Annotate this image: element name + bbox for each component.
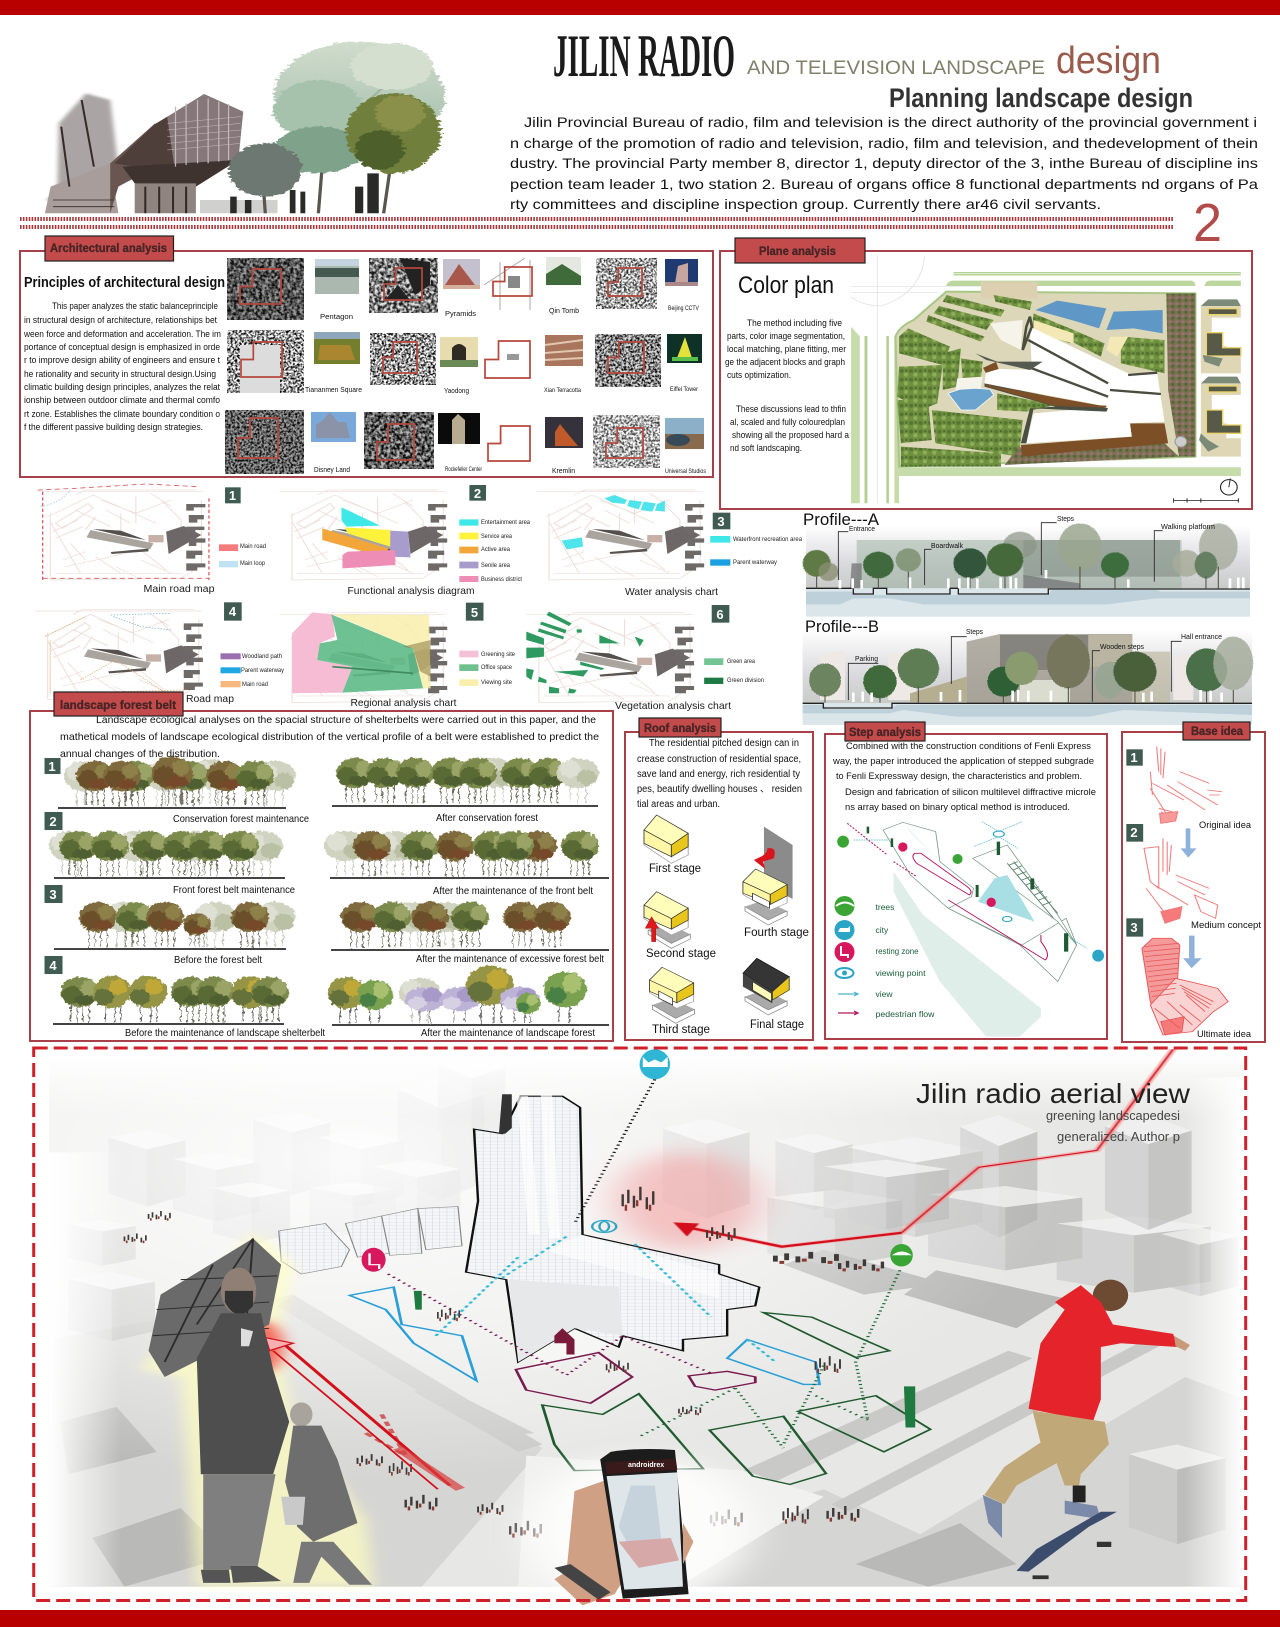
body text: forest belt: Landscape ecological analyses on the spacial structure of shelterbelts were carried out in this paper, and the xyxy=(96,714,596,726)
tag: landscape forest belt xyxy=(54,692,183,716)
profile A: Boardwalk xyxy=(931,543,963,550)
stage labels xyxy=(646,863,809,1036)
body text: principles: in structural design of architecture, relationships bet xyxy=(24,315,217,325)
panel: base idea xyxy=(1122,722,1265,1042)
body text: principles: f the different passive building design strategies. xyxy=(24,422,203,432)
concept 1 xyxy=(1126,747,1222,823)
number markers: base idea: 1 xyxy=(1130,750,1138,765)
intro text block xyxy=(510,114,1258,212)
body text: step: to Fenli Expressway design, the characteristics and problem. xyxy=(836,771,1082,782)
map 5: regional analysis chart: Viewing site xyxy=(481,679,512,686)
icon: first stage house xyxy=(644,815,688,863)
stage labels: Second stage xyxy=(646,948,716,960)
map 4: road map xyxy=(35,602,285,705)
stage labels: Final stage xyxy=(750,1019,804,1031)
body text: color plan: nd soft landscaping. xyxy=(730,443,802,453)
number markers: base idea: 3 xyxy=(1130,920,1138,935)
body text: color plan: local matching, plane fitting, mer xyxy=(727,344,846,354)
text: JILIN RADIO xyxy=(553,23,735,89)
image labels: Universal Studios xyxy=(665,469,706,475)
tree belt captions: After the maintenance of excessive forest belt xyxy=(416,953,604,965)
tree belt captions: After conservation forest xyxy=(436,812,538,824)
aerial view caption: greening landscapedesi xyxy=(1046,1109,1180,1123)
tag: base idea xyxy=(1183,722,1250,740)
profile A xyxy=(803,510,1250,617)
heading: principles of architectural design: Principles of architectural design xyxy=(24,274,225,291)
map 1: main road map: Main loop xyxy=(240,560,265,567)
tree belt captions: Before the forest belt xyxy=(174,954,262,966)
panel: roof analysis xyxy=(625,718,813,1040)
tag: landscape forest belt: landscape forest belt xyxy=(60,698,176,712)
stage labels: First stage xyxy=(649,863,701,875)
image labels: Xian Terracotta xyxy=(544,388,582,394)
image labels: Eiffel Tower xyxy=(670,387,698,393)
body text: principles xyxy=(23,301,221,432)
map 3: water analysis chart xyxy=(536,490,802,598)
site outlines xyxy=(349,1287,930,1484)
number markers: 1 xyxy=(48,759,56,774)
panel: plane analysis xyxy=(720,238,1252,509)
body text: principles: This paper analyzes the static balanceprinciple xyxy=(52,301,218,311)
tag: step analysis xyxy=(845,722,925,741)
dashed frame xyxy=(34,1048,1246,1600)
map 1: main road map xyxy=(38,484,266,595)
icon: resting zone marker xyxy=(362,1248,386,1272)
base idea labels: Ultimate idea xyxy=(1197,1029,1252,1040)
skateboarder xyxy=(983,1280,1190,1579)
body text: principles: r to improve design ability of engineers and ensure t xyxy=(24,355,220,365)
body text: step: Design and fabrication of silicon multilevel diffractive microle xyxy=(845,787,1096,798)
dotted divider xyxy=(20,219,1173,227)
tag: plane analysis: Plane analysis xyxy=(759,244,836,258)
number markers: 4 xyxy=(49,958,57,973)
tree belt captions xyxy=(125,812,604,1039)
body text: forest belt: mathetical models of landscape ecological distribution of the vertical profile of a belt were established to predict the xyxy=(60,731,599,743)
map 4: road map: 4 xyxy=(229,604,237,619)
arrow: medium to ultimate xyxy=(1183,936,1202,968)
tag: plane analysis xyxy=(735,238,865,263)
number markers: 3 xyxy=(49,887,57,902)
icon: fourth stage house xyxy=(743,827,793,925)
body text: step xyxy=(832,741,1096,813)
body text: roof: pes, beautify dwelling houses 、 residen xyxy=(637,784,802,795)
legend item: view: view xyxy=(876,989,893,999)
intro text block: rty committees and discipline inspection group. Currently there ar46 civil servants. xyxy=(510,196,1101,212)
subtitle: design: design xyxy=(1056,40,1161,82)
map 1: main road map: Main road map xyxy=(144,583,215,595)
tag: step analysis: Step analysis xyxy=(849,725,921,739)
house stage diagrams xyxy=(644,815,793,1023)
heading: aerial view: Jilin radio aerial view xyxy=(916,1078,1191,1109)
tree belt captions: Conservation forest maintenance xyxy=(173,813,309,825)
map 2: functional analysis diagram: Service area xyxy=(481,533,512,540)
map 2: functional analysis diagram: Senile area xyxy=(481,562,510,569)
body text: principles: ween force and deformation and acceleration. The im xyxy=(23,329,221,339)
red lower arrow xyxy=(239,1321,460,1489)
header illustration: building and trees xyxy=(45,42,445,213)
ground and city background xyxy=(49,1053,1245,1587)
phone screen brand: androidrex xyxy=(628,1462,664,1469)
subtitle: and television landscape: AND TELEVISION LANDSCAPE xyxy=(747,58,1045,79)
map 3: water analysis chart: 3 xyxy=(717,514,725,529)
aerial view caption: generalized. Author p xyxy=(1057,1130,1180,1144)
stage labels: Fourth stage xyxy=(744,927,809,939)
legend item: city: city xyxy=(876,925,889,935)
crowds of people xyxy=(124,1187,882,1538)
body text: color plan: parts, color image segmentation, xyxy=(727,331,845,341)
map 4: road map: Parent waterway xyxy=(241,667,285,674)
profile A: Walking platform xyxy=(1161,524,1215,531)
body text: roof: save land and energy, rich residential ty xyxy=(637,769,800,780)
tree belts row 2 xyxy=(49,831,609,878)
image labels: Pyramids xyxy=(445,309,476,318)
map 5: regional analysis chart: Regional analysis chart xyxy=(350,697,457,709)
map 2: functional analysis diagram xyxy=(279,485,530,597)
profile B: Steps xyxy=(966,629,983,636)
body text: step: Combined with the construction conditions of Fenli Express xyxy=(846,741,1091,752)
massing concept drawings xyxy=(1126,747,1228,1035)
tag: roof analysis: Roof analysis xyxy=(644,721,716,735)
map 6: vegetation analysis chart: 6 xyxy=(716,607,724,622)
icon: tree marker xyxy=(890,1244,913,1267)
tree belts row 3 xyxy=(54,902,609,950)
body text: forest belt: annual changes of the distribution. xyxy=(60,748,220,760)
number markers: base idea xyxy=(1130,750,1138,935)
body text: principles: portance of conceptual design is emphasized in orde xyxy=(24,342,220,352)
map 5: regional analysis chart: Office space xyxy=(481,664,512,671)
legend item: pedestrian flow: pedestrian flow xyxy=(876,1009,935,1019)
body text: step: ns array based on binary optical method is introduced. xyxy=(845,802,1070,813)
profile A: Profile---A xyxy=(803,510,880,529)
page number: 2 xyxy=(1193,193,1222,253)
body text: color plan xyxy=(725,318,849,453)
body text: principles: ionship between outdoor climate and thermal comfo xyxy=(24,395,220,405)
image labels: Yaodong xyxy=(444,386,469,395)
profile A: Steps xyxy=(1057,516,1074,523)
panel: landscape forest belt xyxy=(30,692,613,1041)
stage labels: Third stage xyxy=(652,1024,710,1036)
profile B: Wooden steps xyxy=(1100,644,1144,651)
image labels: Kremlin xyxy=(552,466,575,475)
body text: step: way, the paper introduced the application of stepped subgrade xyxy=(832,756,1094,767)
tree belts row 4 xyxy=(53,966,609,1025)
icon: architecture model xyxy=(45,93,278,213)
map 2: functional analysis diagram: Functional analysis diagram xyxy=(348,585,475,597)
circulation diagram xyxy=(837,822,1104,1037)
profile B: Hall entrance xyxy=(1181,634,1222,641)
man with umbrella glow xyxy=(141,1231,374,1587)
map 4: road map: Woodland path xyxy=(242,653,282,660)
body text: principles: rt zone. Establishes the climate boundary condition o xyxy=(24,409,220,419)
heading: color plan: Color plan xyxy=(738,272,834,299)
map 4: road map: Main road xyxy=(242,681,268,688)
map 1: main road map: Main road xyxy=(240,543,266,550)
top red bar xyxy=(0,0,1280,15)
map 3: water analysis chart: Parent waterway xyxy=(733,559,778,566)
aerial view caption xyxy=(1046,1109,1180,1144)
red route arrow xyxy=(673,1049,1173,1247)
image grid: aerial and reference photos xyxy=(225,257,704,474)
map 6: vegetation analysis chart: Green division xyxy=(727,677,764,684)
legend item: trees: trees xyxy=(876,902,894,912)
tag: architectural analysis: Architectural analysis xyxy=(50,241,167,255)
panel: step analysis xyxy=(825,722,1107,1039)
body text: roof: tial areas and urban. xyxy=(637,799,720,810)
image labels: Pentagon xyxy=(320,312,353,321)
intro text block: dustry. The provincial Party member 8, director 1, deputy director of the 3, inthe Bureau of discipline ins xyxy=(510,155,1258,171)
image labels: Beijing CCTV xyxy=(668,306,699,312)
section profiles xyxy=(803,510,1253,725)
body text: color plan: The method including five xyxy=(747,318,842,328)
map 2: functional analysis diagram: Entertainment area xyxy=(481,519,530,526)
woman walking xyxy=(281,1402,372,1585)
map 2: functional analysis diagram: Active area xyxy=(481,546,510,553)
map 5: regional analysis chart: 5 xyxy=(471,605,478,620)
map 5: regional analysis chart: Greening site xyxy=(481,651,515,658)
body text: roof: The residential pitched design can in xyxy=(649,738,799,749)
tag: architectural analysis xyxy=(45,236,174,261)
map 3: water analysis chart: Water analysis chart xyxy=(625,586,718,598)
concept 3 xyxy=(1126,918,1228,1035)
base idea labels: Original idea xyxy=(1199,820,1252,831)
intro text block: Jilin Provincial Bureau of radio, film and television is the direct authority of the provincial government i xyxy=(524,114,1257,130)
scene artwork xyxy=(49,1049,1245,1605)
icon: blue city marker xyxy=(640,1049,670,1079)
heading: planning landscape design: Planning landscape design xyxy=(889,83,1193,113)
tag: roof analysis xyxy=(639,718,721,737)
legend item: resting zone: resting zone xyxy=(876,946,919,956)
base idea labels xyxy=(1191,820,1261,1040)
arrow: original to medium xyxy=(1181,828,1197,858)
profile B: Profile---B xyxy=(805,617,879,636)
body text: color plan: These discussions lead to thfin xyxy=(736,404,846,414)
body text: roof xyxy=(637,738,802,810)
body text: principles: he rationality and security in structural design.Using xyxy=(24,369,216,379)
profile B: Parking xyxy=(855,656,878,663)
intro text block: n charge of the promotion of radio and television, radio, film and television, and thedevelopment of thein xyxy=(510,135,1258,151)
tree belt captions: After the maintenance of the front belt xyxy=(433,885,593,897)
body text: principles: climatic building design principles, analyzes the relat xyxy=(24,382,220,392)
residential blocks xyxy=(279,1207,462,1274)
number markers: 2 xyxy=(49,814,57,829)
phone in hand xyxy=(526,1449,751,1605)
number markers xyxy=(44,758,62,974)
icon: second stage house xyxy=(644,892,690,948)
man with umbrella xyxy=(149,1238,289,1583)
concept 2 xyxy=(1126,824,1218,923)
icon: viewing point marker xyxy=(592,1220,616,1232)
panel: architectural analysis xyxy=(20,236,713,477)
image labels: Qin Tomb xyxy=(549,306,579,315)
figure silhouettes in scene xyxy=(414,1291,915,1428)
image labels: Tiananmen Square xyxy=(305,385,362,394)
map 6: vegetation analysis chart: Vegetation analysis chart xyxy=(615,700,731,712)
map 6: vegetation analysis chart xyxy=(526,605,764,712)
tree belt captions: Before the maintenance of landscape shelterbelt xyxy=(125,1027,325,1039)
number markers: base idea: 2 xyxy=(1130,825,1138,840)
tag: base idea: Base idea xyxy=(1191,724,1243,738)
image labels: Disney Land xyxy=(314,465,350,474)
aerial view scene xyxy=(34,1048,1246,1605)
legend item: viewing point: viewing point xyxy=(876,968,926,978)
icon: final stage house xyxy=(743,958,789,1015)
radio tower building xyxy=(466,1094,759,1362)
tree belt captions: After the maintenance of landscape forest xyxy=(421,1027,595,1039)
profile B xyxy=(803,617,1253,725)
body text: forest belt xyxy=(60,714,599,760)
body text: color plan: al, scaled and fully colouredplan xyxy=(730,417,845,427)
image labels: Rockefeller Center xyxy=(445,467,482,473)
map 3: water analysis chart: Waterfront recreation area xyxy=(733,536,802,543)
body text: color plan: cuts optimization. xyxy=(727,370,791,380)
dotted connector lines xyxy=(388,1079,900,1448)
analysis maps 1-6 xyxy=(35,484,802,712)
map 1: main road map: 1 xyxy=(229,488,236,503)
body text: color plan: ge the adjacent blocks and graph xyxy=(725,357,845,367)
tree belt captions: Front forest belt maintenance xyxy=(173,884,295,896)
colour site plan xyxy=(851,255,1241,503)
base idea labels: Medium concept xyxy=(1191,920,1261,931)
body text: color plan: showing all the proposed hard a xyxy=(732,430,849,440)
intro text block: pection team leader 1, two station 2. Bureau of organs office 8 functional departments nd organs of Pa xyxy=(510,176,1258,192)
red glow behind crowd xyxy=(615,1152,759,1250)
icon: third stage house xyxy=(649,967,694,1023)
body text: roof: crease construction of residential space, xyxy=(637,754,801,765)
map 2: functional analysis diagram: 2 xyxy=(474,486,481,501)
map 5: regional analysis chart xyxy=(279,603,515,709)
profile A: Entrance xyxy=(849,526,875,533)
image labels xyxy=(305,306,706,475)
map 6: vegetation analysis chart: Green area xyxy=(727,658,755,665)
tree belts row 1 xyxy=(58,756,599,808)
icon: tree group xyxy=(229,42,445,213)
bottom red bar xyxy=(0,1610,1280,1627)
map 4: road map: Road map xyxy=(186,693,234,705)
legend: step analysis xyxy=(834,896,935,1019)
map 2: functional analysis diagram: Business district xyxy=(481,576,522,583)
